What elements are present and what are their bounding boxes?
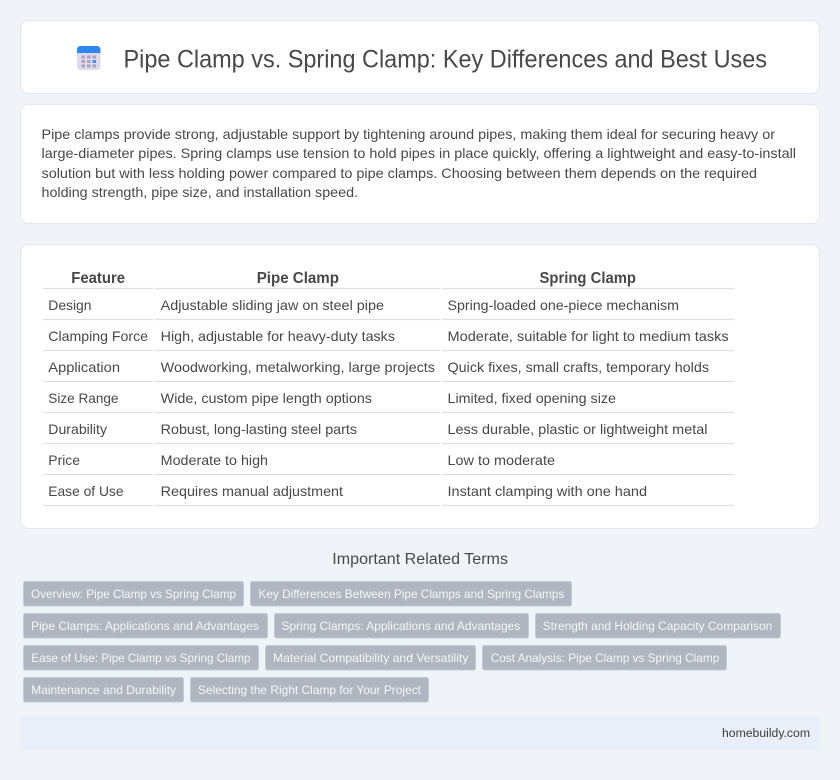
intro text: holding strength, pipe size, and installation speed. xyxy=(42,184,358,200)
table row: clamping force: Clamping Force xyxy=(48,328,148,344)
table row: price: Moderate to high xyxy=(161,452,268,468)
table row: size range xyxy=(43,390,734,412)
table row: clamping force xyxy=(43,328,734,350)
table row: clamping force: Moderate, suitable for light to medium tasks xyxy=(448,328,729,344)
table row: application xyxy=(43,359,734,382)
table row: application: Quick fixes, small crafts, temporary holds xyxy=(448,359,709,375)
table row: ease of use: Ease of Use xyxy=(48,483,124,499)
table row: ease of use: Requires manual adjustment xyxy=(161,483,343,499)
table header: Pipe Clamp xyxy=(257,270,339,287)
comparison table panel xyxy=(20,244,820,528)
related terms heading: Important Related Terms xyxy=(332,551,508,568)
chip xyxy=(482,646,726,670)
table row: design: Spring-loaded one-piece mechanism xyxy=(448,297,679,313)
header panel xyxy=(20,20,820,94)
table row: clamping force: High, adjustable for heavy-duty tasks xyxy=(161,328,395,344)
title: Pipe Clamp vs. Spring Clamp: Key Differences and Best Uses xyxy=(124,46,767,74)
table row: durability: Durability xyxy=(48,421,107,437)
table row: durability xyxy=(43,421,734,444)
chip: Ease of Use: Pipe Clamp vs Spring Clamp xyxy=(31,651,251,665)
table row: size range: Limited, fixed opening size xyxy=(448,390,616,406)
footer bar xyxy=(20,716,820,750)
intro text: solution but with less holding power compared to pipe clamps. Choosing between them depends on the required xyxy=(42,165,757,181)
table row: size range: Wide, custom pipe length options xyxy=(161,390,372,406)
table row: price xyxy=(43,452,734,474)
chip xyxy=(250,582,572,606)
chip: Spring Clamps: Applications and Advantages xyxy=(282,619,520,633)
chip: Strength and Holding Capacity Comparison xyxy=(543,619,772,633)
table row: price: Price xyxy=(48,452,80,468)
chip xyxy=(24,582,244,606)
chip: Key Differences Between Pipe Clamps and Spring Clamps xyxy=(258,587,564,601)
intro panel xyxy=(20,104,820,224)
chip: Overview: Pipe Clamp vs Spring Clamp xyxy=(31,587,236,601)
table header: Feature xyxy=(71,270,125,287)
table row: price: Low to moderate xyxy=(448,452,555,468)
footer source: homebuildy.com xyxy=(722,726,810,740)
table row: design: Design xyxy=(48,297,92,313)
chip xyxy=(266,646,476,670)
intro text: large-diameter pipes. Spring clamps use tension to hold pipes in place quickly, offering a lightweight and easy-to-install xyxy=(42,145,796,161)
table row: design: Adjustable sliding jaw on steel pipe xyxy=(161,297,384,313)
chip: Selecting the Right Clamp for Your Project xyxy=(198,683,422,697)
table header xyxy=(71,270,636,287)
intro text: Pipe clamps provide strong, adjustable support by tightening around pipes, making them ideal for securing heavy or xyxy=(42,126,775,142)
table row: application: Woodworking, metalworking, large projects xyxy=(161,359,435,375)
table row: durability: Less durable, plastic or lightweight metal xyxy=(448,421,708,437)
icon: calendar xyxy=(77,46,100,70)
table row: ease of use xyxy=(43,483,734,506)
table row: design xyxy=(43,288,734,320)
table row: ease of use: Instant clamping with one hand xyxy=(448,483,647,499)
chip: Cost Analysis: Pipe Clamp vs Spring Clamp xyxy=(491,651,720,665)
chip xyxy=(24,678,184,702)
chip xyxy=(274,614,528,638)
chip: Pipe Clamps: Applications and Advantages xyxy=(31,619,259,633)
table row: durability: Robust, long-lasting steel parts xyxy=(161,421,357,437)
table row: size range: Size Range xyxy=(48,390,119,406)
chip xyxy=(24,614,268,638)
related terms chips xyxy=(24,582,780,702)
chip xyxy=(190,678,428,702)
chip: Maintenance and Durability xyxy=(31,683,176,697)
chip xyxy=(24,646,258,670)
table header: Spring Clamp xyxy=(540,270,636,287)
chip xyxy=(536,614,780,638)
table row: application: Application xyxy=(48,359,120,375)
intro text xyxy=(42,126,796,200)
chip: Material Compatibility and Versatility xyxy=(273,651,469,665)
